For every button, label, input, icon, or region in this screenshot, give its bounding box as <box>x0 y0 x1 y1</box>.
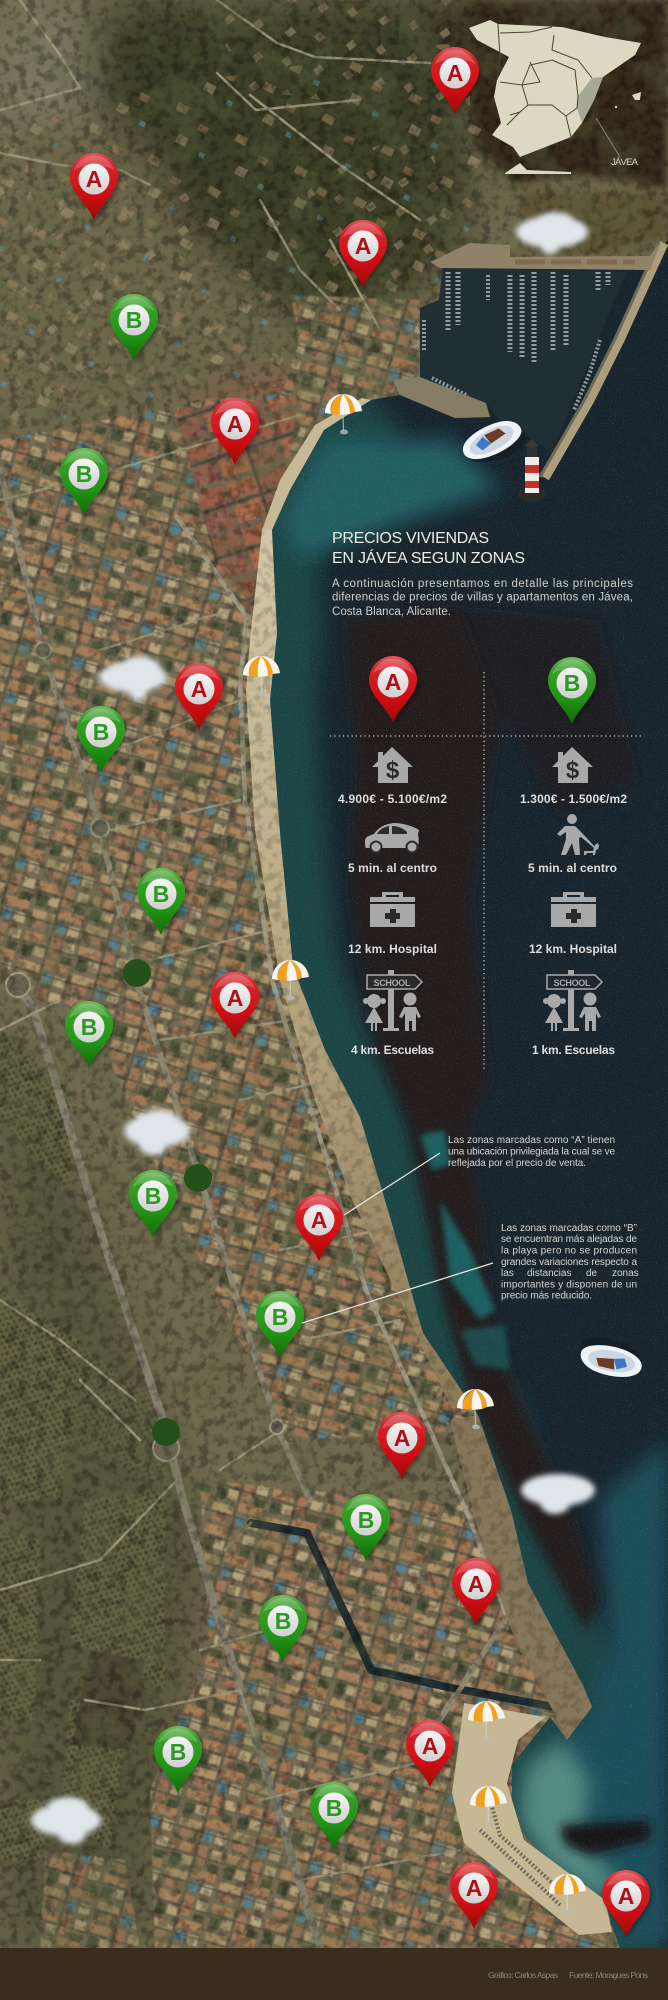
pin A <box>211 398 259 465</box>
pin B: B <box>170 1739 186 1765</box>
sea <box>270 240 668 1948</box>
pin B legend: B <box>564 670 580 696</box>
pin B: B <box>93 719 109 745</box>
intro text: diferencias de precios de villas y apartamentos en Jávea, <box>332 592 633 604</box>
harbour water <box>420 267 626 452</box>
pin B <box>154 1726 202 1793</box>
pin A: A <box>191 676 207 702</box>
pin B: B <box>76 461 92 487</box>
highlighted Valencia region <box>577 77 603 123</box>
column B <box>520 657 627 1057</box>
callout text B: importantes y disponen de un <box>501 1280 637 1290</box>
beach north <box>262 398 371 530</box>
roundabouts <box>6 642 284 1461</box>
pin B <box>342 1494 390 1561</box>
callout text B: distancias <box>527 1268 571 1279</box>
locator map of Spain <box>469 20 641 174</box>
pin B <box>137 868 185 935</box>
callout text A: reflejada por el precio de venta. <box>448 1158 586 1169</box>
beach umbrellas <box>243 394 586 1914</box>
icon: school sign with children <box>363 970 422 1031</box>
pin A <box>295 1194 343 1261</box>
pin B <box>256 1291 304 1358</box>
intro text <box>332 578 633 618</box>
icon: car <box>365 823 419 852</box>
callout text B: Las zonas marcadas como “B” <box>501 1223 637 1234</box>
schools B: 1 km. Escuelas <box>532 1043 615 1057</box>
clouds <box>31 212 595 1844</box>
scattered villas on the hillside <box>0 0 500 450</box>
sea speckle <box>270 249 668 1948</box>
pin A: A <box>311 1207 327 1233</box>
dark brown corner behind locator map <box>455 0 668 190</box>
pin B: B <box>326 1795 342 1821</box>
callout text B: zonas <box>612 1268 639 1279</box>
pin A <box>602 1870 650 1937</box>
distance B centre: 5 min. al centro <box>528 861 617 875</box>
pin B <box>310 1782 358 1849</box>
callout text A <box>448 1135 615 1169</box>
callout text B <box>501 1223 639 1302</box>
callout text B: se encuentran más alejadas de <box>501 1234 637 1245</box>
footer credit: fuente: Fuente: Moragues Pons <box>569 1970 648 1980</box>
title: PRECIOS VIVIENDAS <box>332 530 489 547</box>
pin B <box>259 1595 307 1662</box>
pin B legend <box>548 657 596 724</box>
footer credit: grafico: Gráfico: Carlos Aspas <box>488 1970 558 1980</box>
trees <box>123 959 212 1446</box>
distance A centre: 5 min. al centro <box>348 861 437 875</box>
pin A: A <box>466 1875 482 1901</box>
icon: person walking dog <box>557 814 599 855</box>
pin A: A <box>355 233 371 259</box>
pin A: A <box>447 60 463 86</box>
dark seagrass patches <box>345 600 650 1855</box>
pin B <box>60 448 108 515</box>
pin A <box>378 1412 426 1479</box>
pin B: B <box>81 1014 97 1040</box>
column A <box>338 656 447 1057</box>
pin A <box>211 972 259 1039</box>
pin A <box>450 1862 498 1929</box>
lighthouse <box>518 439 546 501</box>
pin B: B <box>126 307 142 333</box>
title <box>332 530 525 567</box>
region borders <box>497 24 592 137</box>
hospital B: 12 km. Hospital <box>529 942 617 956</box>
footer bar <box>0 1948 668 2000</box>
comparison dividers <box>330 672 643 1070</box>
pin B: B <box>153 881 169 907</box>
icon: house with dollar <box>372 747 413 784</box>
pin B: B <box>145 1183 161 1209</box>
map label: JÁVEA <box>611 157 639 168</box>
intro text: A continuación presentamos en detalle las principales <box>332 578 633 590</box>
pin B <box>77 706 125 773</box>
pin B: B <box>272 1304 288 1330</box>
callout line A <box>344 1153 440 1215</box>
callout text A: Las zonas marcadas como “A” tienen <box>448 1135 615 1146</box>
rocky peninsula <box>450 1415 592 1740</box>
pin B: B <box>275 1608 291 1634</box>
pin A: A <box>394 1425 410 1451</box>
callout line B <box>302 1263 493 1323</box>
callout text A: una ubicación privilegiada la cual se ve <box>448 1146 615 1158</box>
pin B <box>65 1001 113 1068</box>
pin A: A <box>618 1883 634 1909</box>
callout text B: de <box>586 1268 598 1279</box>
price B: 1.300€ - 1.500€/m2 <box>520 792 627 806</box>
pin B <box>110 294 158 361</box>
icon: house with dollar <box>552 747 593 784</box>
icon: school sign with children: SCHOOL <box>374 978 411 988</box>
pin A: A <box>422 1733 438 1759</box>
icon: first aid kit <box>370 892 415 927</box>
title: EN JÁVEA SEGUN ZONAS <box>332 548 525 567</box>
pin A: A <box>468 1571 484 1597</box>
pin A legend: A <box>385 669 401 695</box>
icon: house with dollar: $ <box>386 757 400 784</box>
callout text B: grandes variaciones respecto a <box>501 1257 637 1268</box>
pin A legend <box>369 656 417 723</box>
quay <box>430 240 662 270</box>
cloud 1 <box>516 212 588 254</box>
cloud 5 <box>31 1797 101 1844</box>
cloud 4 <box>521 1474 595 1514</box>
cloud 3 <box>124 1110 190 1155</box>
intro text: Costa Blanca, Alicante. <box>332 606 451 618</box>
callout text B: la playa pero no se producen <box>501 1246 637 1256</box>
icon: school sign with children: SCHOOL <box>554 978 591 988</box>
breakwater <box>545 243 664 478</box>
dense urban blocks <box>0 295 612 1950</box>
pin B <box>129 1170 177 1237</box>
price A: 4.900€ - 5.100€/m2 <box>338 792 447 806</box>
pin A: A <box>227 985 243 1011</box>
callout text B: las <box>501 1268 514 1279</box>
pin B: B <box>358 1507 374 1533</box>
pin A: A <box>227 411 243 437</box>
pin A <box>339 220 387 287</box>
schools A: 4 km. Escuelas <box>351 1043 434 1057</box>
moored yachts <box>424 272 608 410</box>
pin A <box>452 1558 500 1625</box>
cloud 2 <box>99 656 167 700</box>
pin A <box>175 663 223 730</box>
long beach <box>246 530 478 1415</box>
boat at sea <box>574 1330 647 1386</box>
sand and rock texture <box>244 530 588 1736</box>
pin A <box>431 47 479 114</box>
pin A <box>70 153 118 220</box>
pin A: A <box>86 166 102 192</box>
jetty <box>393 377 490 418</box>
bay beach <box>452 1703 612 1935</box>
icon: first aid kit <box>551 892 596 927</box>
hospital A: 12 km. Hospital <box>348 942 437 956</box>
boat in the harbour <box>458 415 531 470</box>
icon: school sign with children <box>543 970 602 1031</box>
pin A <box>406 1720 454 1787</box>
callout text B: precio más reducido. <box>501 1290 592 1302</box>
icon: house with dollar: $ <box>566 757 580 784</box>
